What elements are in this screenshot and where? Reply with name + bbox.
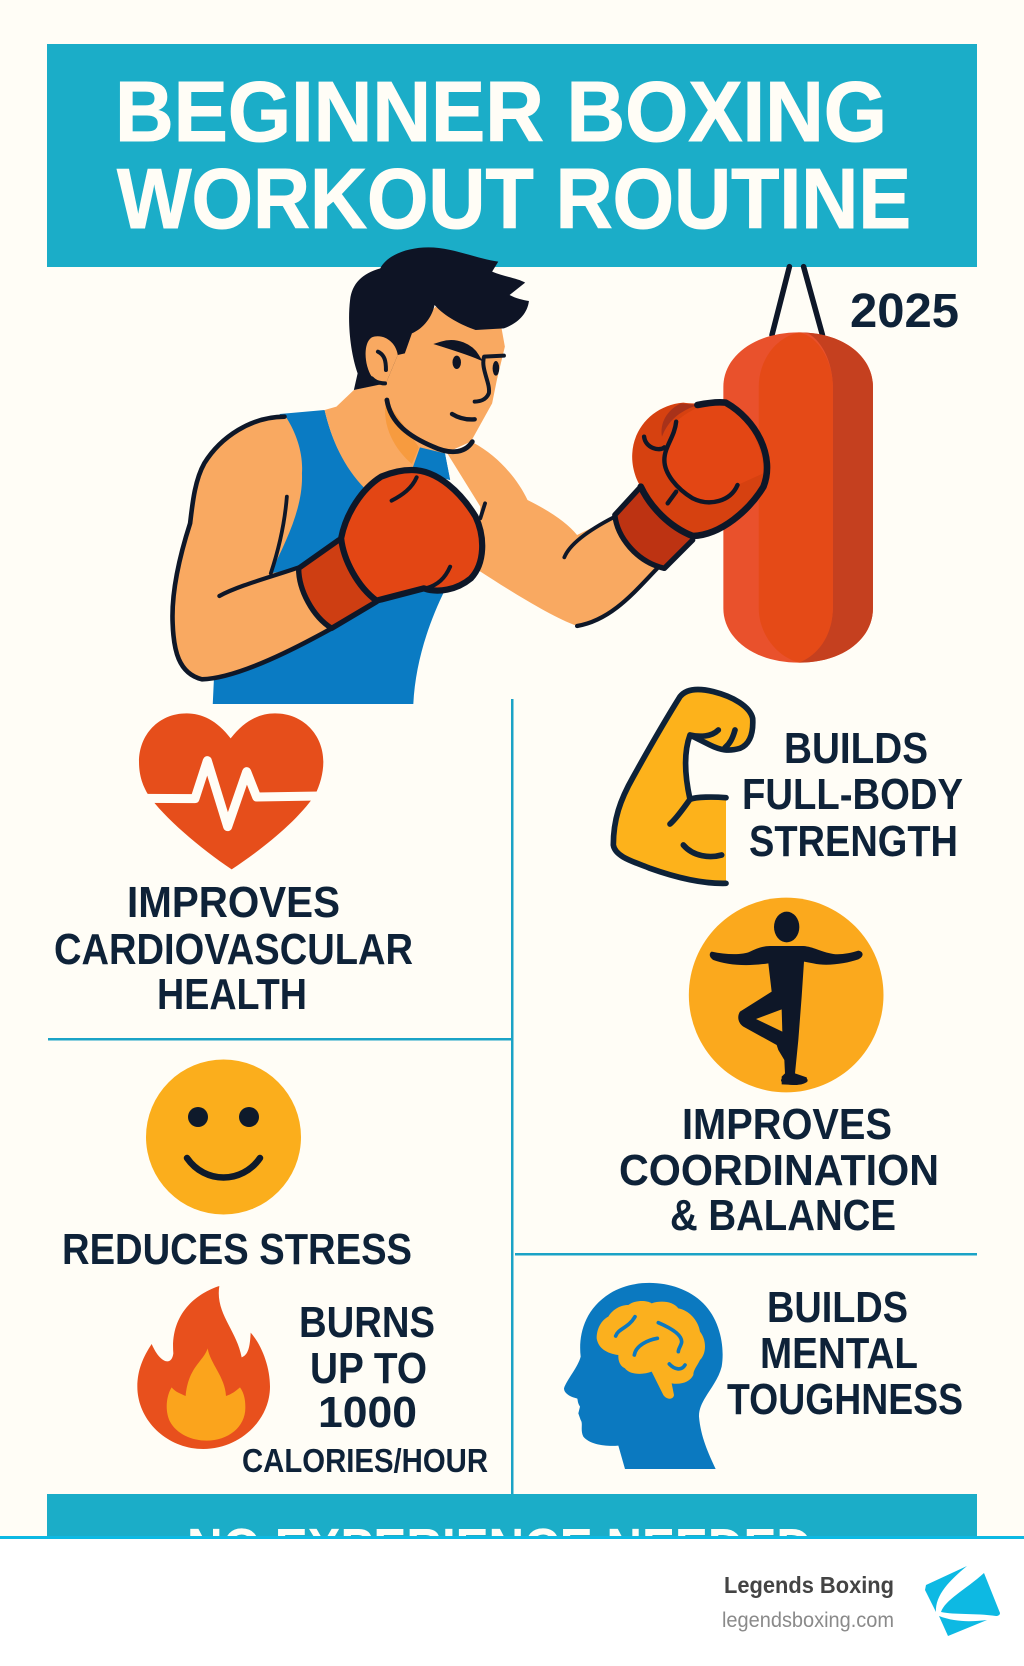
panel: burns calories xyxy=(137,1286,488,1479)
text: burns up to 1000 calories per hour xyxy=(242,1298,488,1479)
icon: flexed arm xyxy=(613,690,753,884)
text: improves cardiovascular health: IMPROVES xyxy=(127,878,340,927)
text: builds full-body strength: FULL-BODY xyxy=(742,770,963,819)
text: builds mental toughness: BUILDS xyxy=(767,1283,908,1332)
footer website: legendsboxing.com xyxy=(722,1609,894,1632)
title: BEGINNER BOXING xyxy=(115,65,887,160)
text: burns up to 1000 calories per hour: 1000 xyxy=(318,1388,417,1437)
punching glove xyxy=(615,402,767,568)
icon: balancing figure xyxy=(689,898,883,1092)
text: reduces stress: REDUCES STRESS xyxy=(62,1225,412,1274)
icon: heart with pulse xyxy=(139,713,323,869)
text: improves coordination and balance xyxy=(619,1100,939,1240)
icon: footer logo xyxy=(925,1566,1000,1636)
text: builds full-body strength: STRENGTH xyxy=(749,817,958,866)
text: improves coordination and balance: IMPROVES xyxy=(682,1100,892,1149)
divider: left horizontal xyxy=(48,1038,512,1040)
text: burns up to 1000 calories per hour: CALORIES/HOUR xyxy=(242,1442,488,1479)
front glove xyxy=(299,470,482,628)
divider: vertical xyxy=(511,699,514,1494)
divider: right horizontal xyxy=(515,1253,977,1256)
illustration: boxer hitting punching bag xyxy=(172,247,873,704)
text: builds mental toughness xyxy=(727,1283,963,1424)
panel: coordination and balance xyxy=(619,898,939,1240)
panel: cardiovascular health xyxy=(54,713,413,1019)
text: improves coordination and balance: COORDINATION xyxy=(619,1146,939,1195)
boxer facial features xyxy=(387,343,504,452)
icon: smiley xyxy=(146,1060,301,1214)
text: improves cardiovascular health xyxy=(54,878,413,1019)
text: improves coordination and balance: & BALANCE xyxy=(670,1191,896,1240)
text: burns up to 1000 calories per hour: BURNS xyxy=(299,1298,435,1347)
boxer left arm xyxy=(172,416,332,679)
panel: full-body strength xyxy=(613,690,963,884)
panel: mental toughness xyxy=(564,1283,963,1469)
boxer right arm xyxy=(447,443,657,626)
panel: reduces stress xyxy=(62,1060,412,1274)
icon: flame xyxy=(137,1286,270,1449)
title: WORKOUT ROUTINE xyxy=(117,152,911,247)
header banner xyxy=(47,44,977,267)
boxer outlines xyxy=(172,417,657,679)
text: burns up to 1000 calories per hour: UP TO xyxy=(310,1344,427,1393)
footer brand name: Legends Boxing xyxy=(724,1572,894,1598)
boxer neck and face xyxy=(325,307,505,488)
boxer tank top xyxy=(213,410,450,704)
text: improves cardiovascular health: HEALTH xyxy=(157,970,307,1019)
footer bar xyxy=(0,1536,1024,1666)
year label: 2025 xyxy=(850,285,959,338)
title xyxy=(115,65,911,247)
banner text: NO EXPERIENCE NEEDED xyxy=(187,1518,812,1578)
bottom banner xyxy=(47,1494,977,1578)
icon: head with brain xyxy=(564,1283,723,1469)
text: builds full-body strength: BUILDS xyxy=(784,724,928,773)
boxer hair and ear xyxy=(349,247,529,390)
text: improves cardiovascular health: CARDIOVASCULAR xyxy=(54,925,413,974)
text: builds mental toughness: TOUGHNESS xyxy=(727,1375,963,1424)
text: builds full-body strength xyxy=(742,724,963,866)
punching bag xyxy=(723,267,873,663)
text: builds mental toughness: MENTAL xyxy=(760,1329,918,1378)
